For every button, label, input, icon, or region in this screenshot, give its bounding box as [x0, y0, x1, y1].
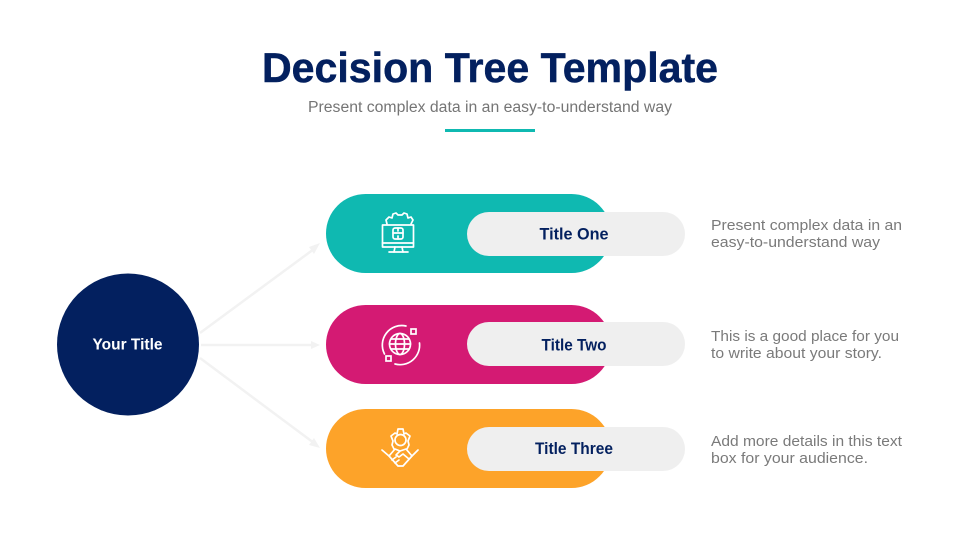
subtitle: Present complex data in an easy-to-understand way — [308, 99, 672, 116]
label pill: title one: Title One — [540, 226, 608, 244]
arrow: root to branch three — [200, 358, 320, 448]
root node: your title — [57, 274, 199, 416]
branch three: orange pill — [326, 409, 685, 488]
arrow: root to branch one — [200, 243, 320, 333]
arrow: root to branch two — [201, 341, 320, 349]
title: Decision Tree Template — [262, 44, 718, 91]
branch two: magenta pill — [326, 305, 685, 384]
root node: your title: Your Title — [92, 336, 163, 354]
branch three description: box for your audience. — [711, 450, 868, 467]
icon: monitor with gear — [382, 213, 414, 252]
label pill: title two: Title Two — [542, 336, 606, 354]
label pill: title three — [467, 427, 685, 471]
branch two description: to write about your story. — [711, 345, 882, 362]
branch three description: Add more details in this text — [711, 433, 903, 450]
icon: handshake with gear — [382, 429, 418, 466]
icon: globe with orbit — [382, 326, 420, 365]
branch two description: This is a good place for you — [711, 328, 899, 345]
branch one: teal pill — [326, 194, 685, 273]
branch one description: Present complex data in an — [711, 217, 902, 234]
label pill: title two — [467, 322, 685, 366]
label pill: title one — [467, 212, 685, 256]
title underline accent — [445, 129, 535, 132]
label pill: title three: Title Three — [535, 440, 613, 458]
branch one description: easy-to-understand way — [711, 234, 881, 251]
